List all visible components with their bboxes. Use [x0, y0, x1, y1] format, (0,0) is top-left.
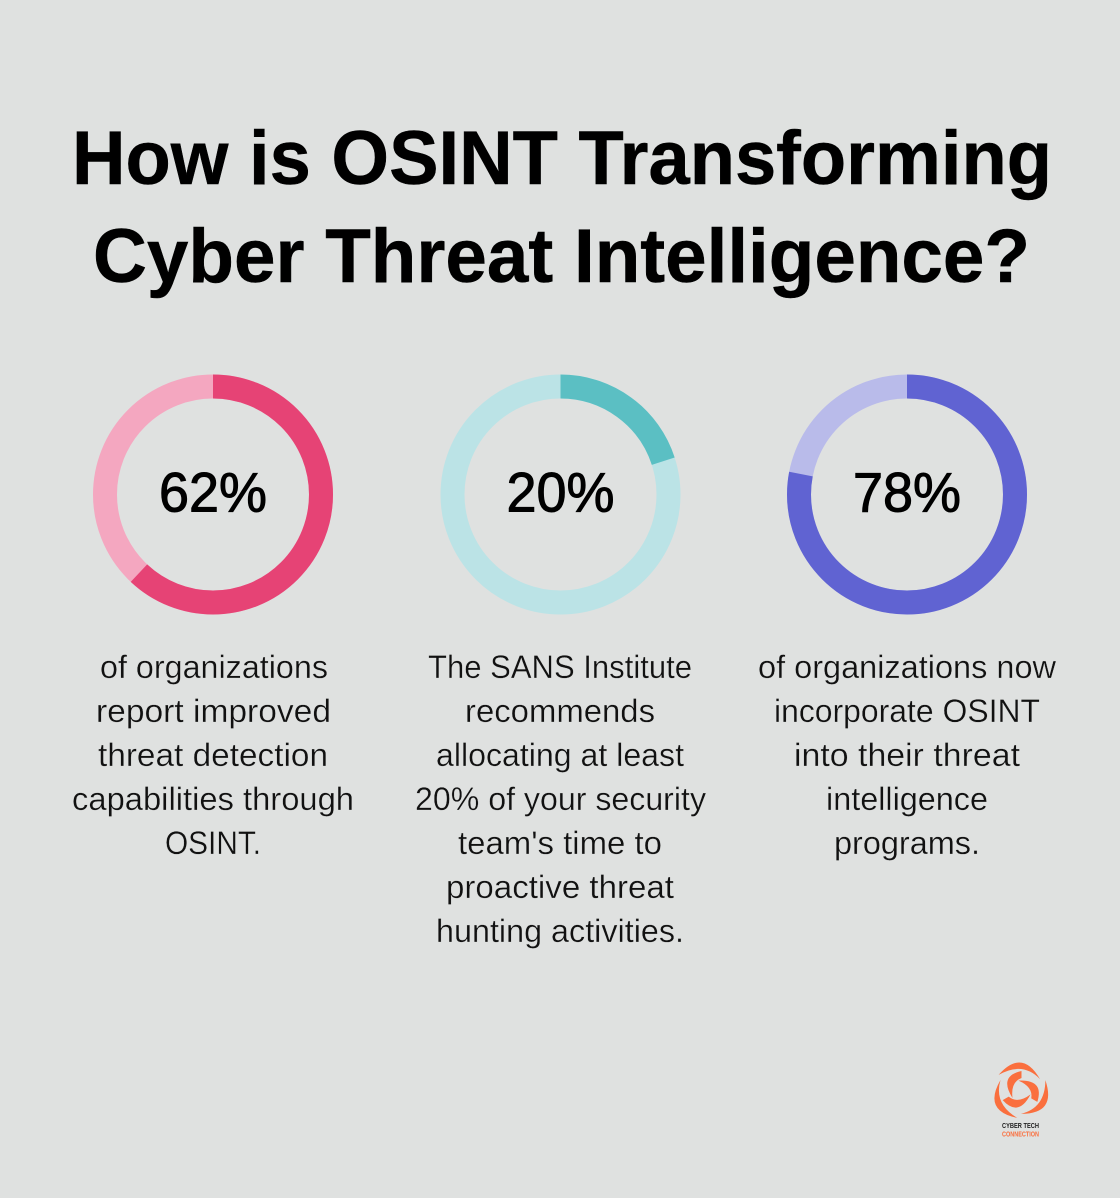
- panel: 62% stat: [72, 386, 354, 861]
- description: 62%: of organizations: [100, 649, 328, 685]
- stat number: 20%: 20%: [506, 460, 614, 524]
- panel: 78% stat: [758, 386, 1057, 861]
- description: 78%: into their threat: [794, 737, 1020, 773]
- icon: orange swirl: [994, 1055, 1057, 1124]
- description: 62%: threat detection: [98, 737, 328, 773]
- donut chart: 20%: [452, 386, 668, 602]
- description: 20%: 20% of your security: [415, 781, 706, 817]
- donut chart: 78%: [799, 386, 1015, 602]
- description: 62%: capabilities through: [72, 781, 354, 817]
- panel: 20% stat: [415, 386, 706, 949]
- description: 20%: recommends: [465, 693, 655, 729]
- description: 78%: of organizations now: [758, 649, 1057, 685]
- description: 78%: [758, 649, 1057, 861]
- description: 20%: hunting activities.: [436, 913, 684, 949]
- title: How is OSINT Transforming: [72, 116, 1052, 201]
- logo text: CYBER TECH: [1002, 1123, 1039, 1130]
- description: 20%: proactive threat: [446, 869, 674, 905]
- description: 78%: programs.: [834, 825, 980, 861]
- description: 62%: OSINT.: [165, 825, 261, 861]
- description: 78%: intelligence: [826, 781, 988, 817]
- description: 62%: [72, 649, 354, 861]
- stat number: 78%: 78%: [853, 460, 961, 524]
- description: 20%: team's time to: [458, 825, 662, 861]
- title: Cyber Threat Intelligence?: [93, 214, 1030, 299]
- donut chart: 62%: [105, 386, 321, 602]
- description: 20%: [415, 649, 706, 949]
- logo text: [1002, 1123, 1039, 1138]
- description: 78%: incorporate OSINT: [774, 693, 1040, 729]
- description: 20%: The SANS Institute: [428, 649, 692, 685]
- title: [72, 116, 1052, 299]
- logo: Cyber Tech Connection: [994, 1055, 1057, 1138]
- stat number: 62%: 62%: [159, 460, 267, 524]
- logo text: CONNECTION: [1002, 1132, 1039, 1138]
- description: 20%: allocating at least: [436, 737, 684, 773]
- description: 62%: report improved: [96, 693, 331, 729]
